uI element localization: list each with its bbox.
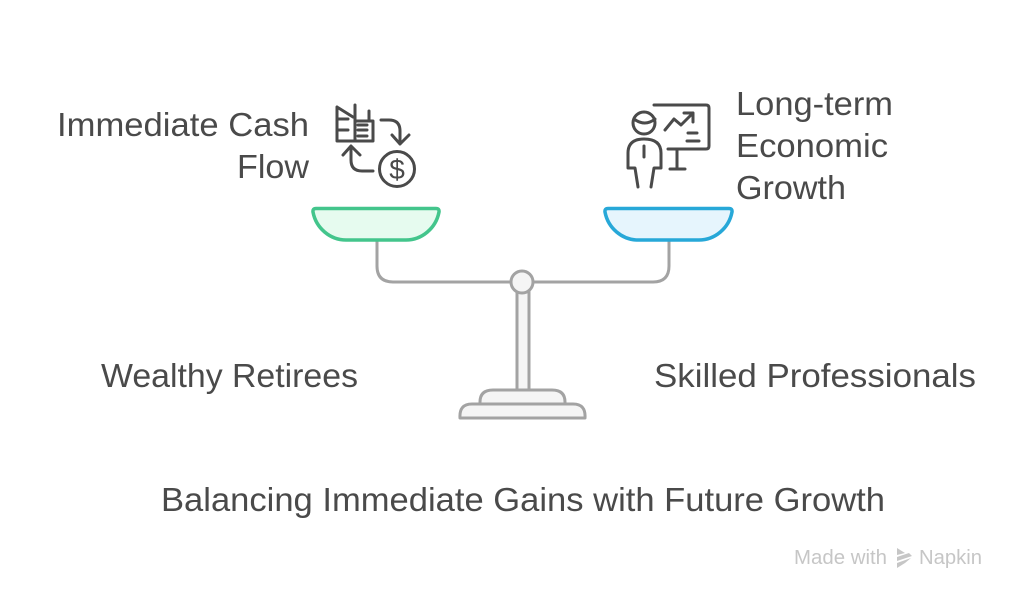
label: skilled professionals: Skilled Professionals — [654, 357, 976, 394]
icon: growth arrow — [665, 113, 699, 141]
label: immediate cash flow: Immediate Cash — [57, 106, 309, 143]
icon: board — [654, 105, 709, 169]
icon: cash flow — [337, 105, 414, 186]
icon: book — [337, 105, 373, 141]
label: immediate cash flow — [57, 106, 309, 185]
scale lower base — [460, 404, 585, 418]
label: immediate cash flow: Flow — [237, 148, 309, 185]
label: long-term economic growth: Long-term — [736, 85, 893, 122]
scale pivot — [511, 271, 533, 293]
icon: arrow up — [343, 146, 373, 171]
icon: dollar sign: $ — [389, 154, 405, 185]
scale upper base — [480, 390, 565, 404]
left pan — [313, 208, 439, 240]
right pan — [605, 208, 732, 240]
icon: person — [628, 112, 661, 187]
scale beam — [377, 240, 669, 282]
icon: presenter with growth chart — [628, 105, 709, 187]
label: long-term economic growth: Economic — [736, 127, 888, 164]
watermark: Napkin — [919, 547, 982, 569]
icon: napkin logo — [897, 548, 912, 568]
scale pole — [517, 291, 529, 390]
watermark: Made with — [794, 547, 887, 569]
watermark — [794, 547, 982, 569]
icon: dollar coin — [380, 152, 414, 186]
label: long-term economic growth: Growth — [736, 169, 846, 206]
icon: arrow down — [381, 120, 409, 144]
label: wealthy retirees: Wealthy Retirees — [101, 357, 358, 394]
title: Balancing Immediate Gains with Future Growth — [161, 481, 885, 518]
label: long-term economic growth — [736, 85, 893, 206]
